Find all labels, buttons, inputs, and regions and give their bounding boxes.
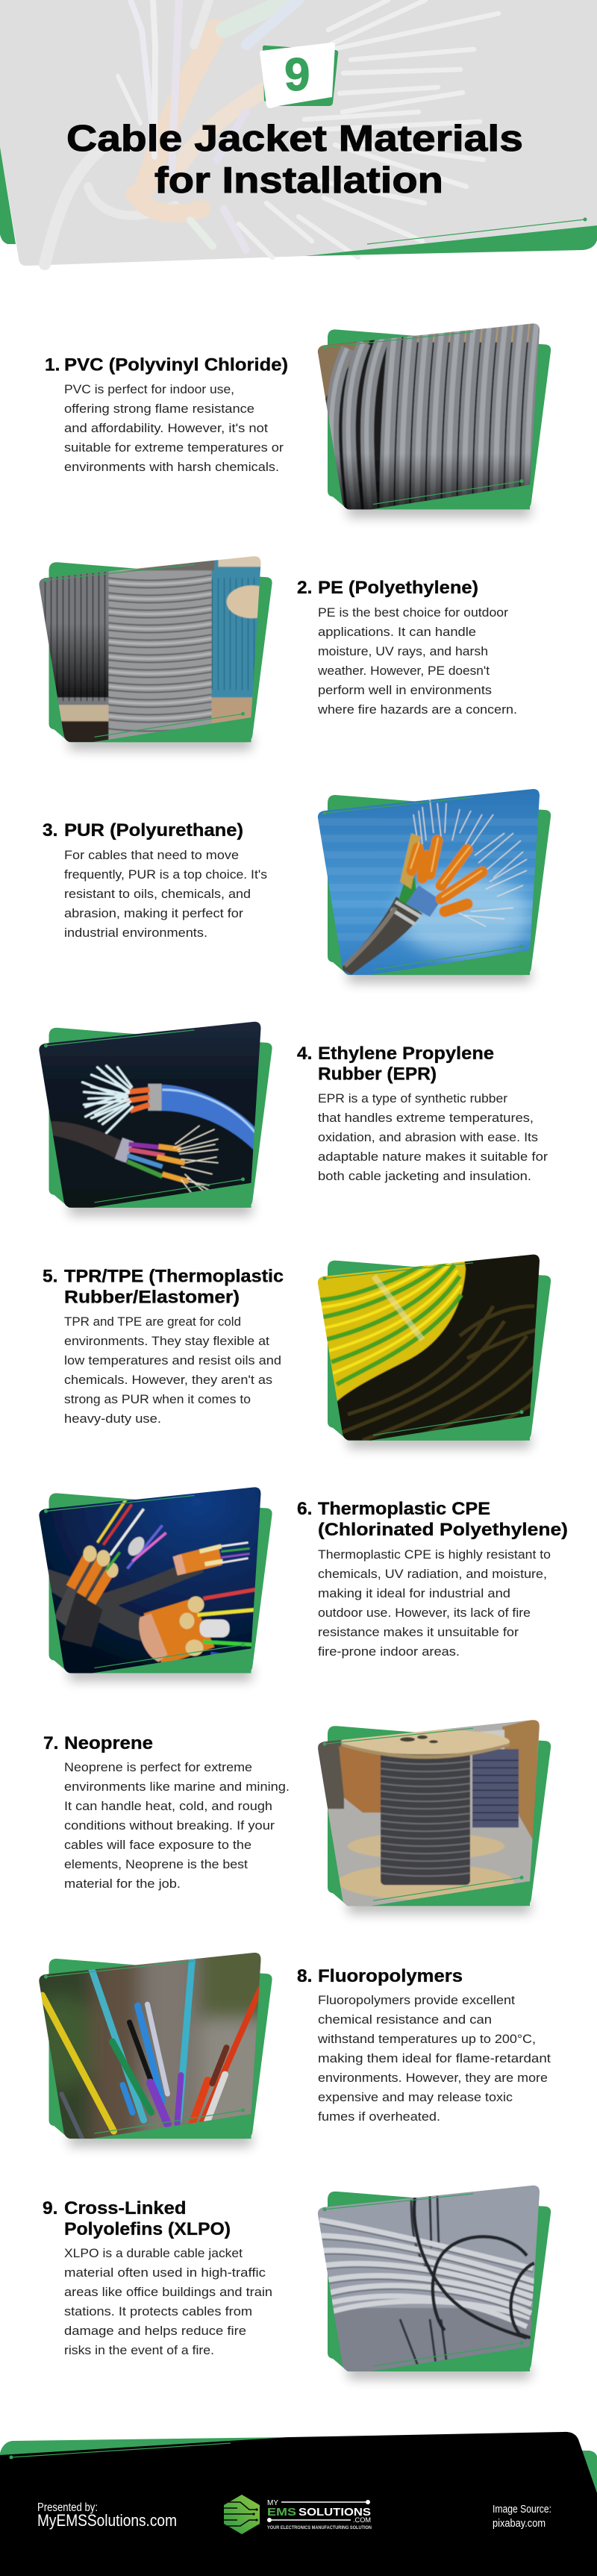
heading 6 (297, 1499, 568, 1540)
body 1 (64, 382, 284, 474)
heading 4 (297, 1044, 494, 1085)
image card 5: yellow-green and black cables (314, 1250, 551, 1448)
header banner (0, 0, 597, 266)
body 5: heavy-duty use. (64, 1412, 161, 1426)
body 3: industrial environments. (64, 926, 207, 940)
body 3: For cables that need to move (64, 848, 239, 862)
heading 6: 6. (297, 1499, 312, 1519)
heading 9: Polyolefins (XLPO) (64, 2219, 231, 2239)
body 8: making them ideal for flame-retardant (318, 2051, 551, 2065)
body 8 (317, 1993, 551, 2124)
section 8: Fluoropolymers (39, 1953, 551, 2153)
body 1: and affordability. However, it's not (64, 421, 268, 435)
image card 6: fibre optic bundles on dark blue (36, 1482, 272, 1681)
image card 3: multicore cable on blue (314, 785, 551, 982)
logo wordmark (267, 2499, 372, 2530)
presented by: Presented by: (37, 2501, 98, 2514)
body 2: PE is the best choice for outdoor (318, 605, 508, 620)
number badge (260, 43, 338, 108)
logo wordmark: YOUR ELECTRONICS MANUFACTURING SOLUTION (267, 2526, 372, 2530)
body 3: abrasion, making it perfect for (64, 906, 243, 920)
body 4: that handles extreme temperatures, (318, 1111, 534, 1125)
heading 9: Cross-Linked (64, 2198, 187, 2218)
footer (0, 2432, 597, 2576)
section 6: CPE (36, 1482, 568, 1681)
body 6 (318, 1547, 551, 1659)
header accent line (367, 218, 587, 244)
body 1: offering strong flame resistance (64, 402, 254, 416)
title: for Installation (154, 160, 443, 201)
image card 4: blue and black cables on carbon (36, 1017, 272, 1215)
heading 6: (Chlorinated Polyethylene) (318, 1520, 568, 1540)
logo hexagon icon (224, 2495, 260, 2534)
body 9: XLPO is a durable cable jacket (64, 2246, 243, 2260)
body 7: material for the job. (64, 1877, 181, 1891)
body 9: stations. It protects cables from (64, 2304, 252, 2318)
heading 6: Thermoplastic CPE (318, 1499, 490, 1519)
heading 9 (43, 2198, 231, 2239)
header background: faded cable photo (0, 0, 597, 266)
body 4: oxidation, and abrasion with ease. Its (318, 1130, 538, 1144)
body 7: environments like marine and mining. (64, 1780, 290, 1794)
image source: pixabay.com (493, 2517, 546, 2530)
section 2: PE (36, 546, 517, 749)
presented by (37, 2501, 177, 2530)
number badge: 9 (284, 49, 310, 101)
body 9: material often used in high-traffic (64, 2265, 266, 2280)
heading 2: PE (Polyethylene) (318, 578, 478, 598)
body 4: adaptable nature makes it suitable for (318, 1150, 548, 1164)
body 8: chemical resistance and can (318, 2012, 492, 2027)
body 5: strong as PUR when it comes to (64, 1392, 251, 1406)
body 6: resistance makes it unsuitable for (318, 1625, 519, 1639)
image card 1: grey coiled cables (314, 316, 551, 517)
body 5: low temperatures and resist oils and (64, 1353, 281, 1367)
logo wordmark: EMS (267, 2506, 296, 2519)
body 8: expensive and may release toxic (318, 2090, 513, 2104)
body 5: TPR and TPE are great for cold (64, 1314, 241, 1329)
body 5 (64, 1314, 281, 1426)
body 2: applications. It can handle (318, 625, 476, 639)
logo (224, 2495, 372, 2534)
body 5: chemicals. However, they aren't as (64, 1373, 272, 1387)
footer black panel (0, 2432, 597, 2576)
image card 2: spools of grey and blue cable (36, 546, 278, 749)
image card 8: coloured tubes on blurred background (39, 1953, 272, 2153)
body 2: where fire hazards are a concern. (317, 702, 517, 717)
heading 8: Fluoropolymers (318, 1966, 463, 1986)
image card 7: cable spool on wooden drum (314, 1715, 551, 1913)
heading 3: PUR (Polyurethane) (64, 820, 243, 841)
body 2: perform well in environments (318, 683, 492, 697)
heading 3: 3. (43, 820, 57, 841)
body 7: elements, Neoprene is the best (64, 1857, 248, 1871)
body 8: Fluoropolymers provide excellent (318, 1993, 515, 2007)
body 3 (64, 848, 267, 940)
heading 1: PVC (Polyvinyl Chloride) (64, 355, 288, 375)
heading 4: Ethylene Propylene (318, 1044, 494, 1064)
body 6: outdoor use. However, its lack of fire (318, 1606, 531, 1620)
body 4 (318, 1091, 548, 1183)
heading 4: 4. (297, 1044, 312, 1064)
footer green accents (0, 2437, 597, 2497)
body 9: risks in the event of a fire. (64, 2343, 214, 2357)
presented by: MyEMSSolutions.com (37, 2511, 177, 2530)
body 7: conditions without breaking. If your (64, 1818, 275, 1833)
heading 9: 9. (43, 2198, 57, 2218)
section 1: PVC (45, 316, 551, 517)
body 7: It can handle heat, cold, and rough (64, 1799, 272, 1813)
heading 5 (43, 1266, 284, 1307)
body 7: Neoprene is perfect for extreme (64, 1760, 252, 1774)
body 4: EPR is a type of synthetic rubber (318, 1091, 507, 1105)
heading 7: Neoprene (64, 1733, 153, 1753)
body 8: environments. However, they are more (318, 2071, 548, 2085)
logo wordmark: SOLUTIONS (298, 2506, 371, 2519)
section 4: EPR (36, 1017, 548, 1215)
body 3: resistant to oils, chemicals, and (64, 887, 251, 901)
body 2: weather. However, PE doesn't (317, 664, 490, 678)
body 8: withstand temperatures up to 200°C, (317, 2032, 536, 2046)
body 4: both cable jacketing and insulation. (318, 1169, 531, 1183)
heading 4: Rubber (EPR) (318, 1064, 437, 1085)
body 5: environments. They stay flexible at (64, 1334, 269, 1348)
body 9: areas like office buildings and train (64, 2285, 272, 2299)
left green corner (0, 147, 16, 244)
footer accent line (9, 2443, 231, 2459)
section 9: XLPO (43, 2181, 551, 2379)
heading 8: 8. (297, 1966, 312, 1986)
heading 2: 2. (297, 578, 312, 598)
heading 7: 7. (43, 1733, 58, 1753)
right green wedge (304, 225, 597, 256)
section 7: Neoprene (43, 1715, 551, 1913)
image source: Image Source: (493, 2503, 551, 2516)
image source (493, 2503, 551, 2530)
body 7 (64, 1760, 290, 1891)
logo wordmark: .COM (353, 2516, 371, 2524)
heading 5: Rubber/Elastomer) (64, 1287, 240, 1307)
body 6: making it ideal for industrial and (318, 1586, 510, 1600)
section 3: PUR (43, 785, 551, 982)
logo wordmark: MY (267, 2499, 278, 2507)
title: Cable Jacket Materials (66, 119, 523, 159)
body 2 (317, 605, 517, 717)
heading 5: TPR/TPE (Thermoplastic (64, 1266, 284, 1287)
image card 9: silver wires with black loops (314, 2181, 551, 2379)
body 6: chemicals, UV radiation, and moisture, (318, 1567, 547, 1581)
section 5: TPR/TPE (43, 1250, 551, 1448)
body 6: Thermoplastic CPE is highly resistant to (318, 1547, 551, 1562)
body 9: damage and helps reduce fire (64, 2324, 246, 2338)
body 6: fire-prone indoor areas. (318, 1644, 460, 1659)
body 8: fumes if overheated. (318, 2109, 440, 2124)
body 3: frequently, PUR is a top choice. It's (64, 867, 267, 882)
body 1: PVC is perfect for indoor use, (64, 382, 234, 396)
body 9 (64, 2246, 272, 2357)
title (66, 119, 523, 201)
body 1: suitable for extreme temperatures or (64, 440, 284, 455)
body 2: moisture, UV rays, and harsh (318, 644, 488, 658)
body 7: cables will face exposure to the (64, 1838, 251, 1852)
heading 1: 1. (45, 355, 60, 375)
body 1: environments with harsh chemicals. (64, 460, 279, 474)
heading 5: 5. (43, 1266, 57, 1287)
